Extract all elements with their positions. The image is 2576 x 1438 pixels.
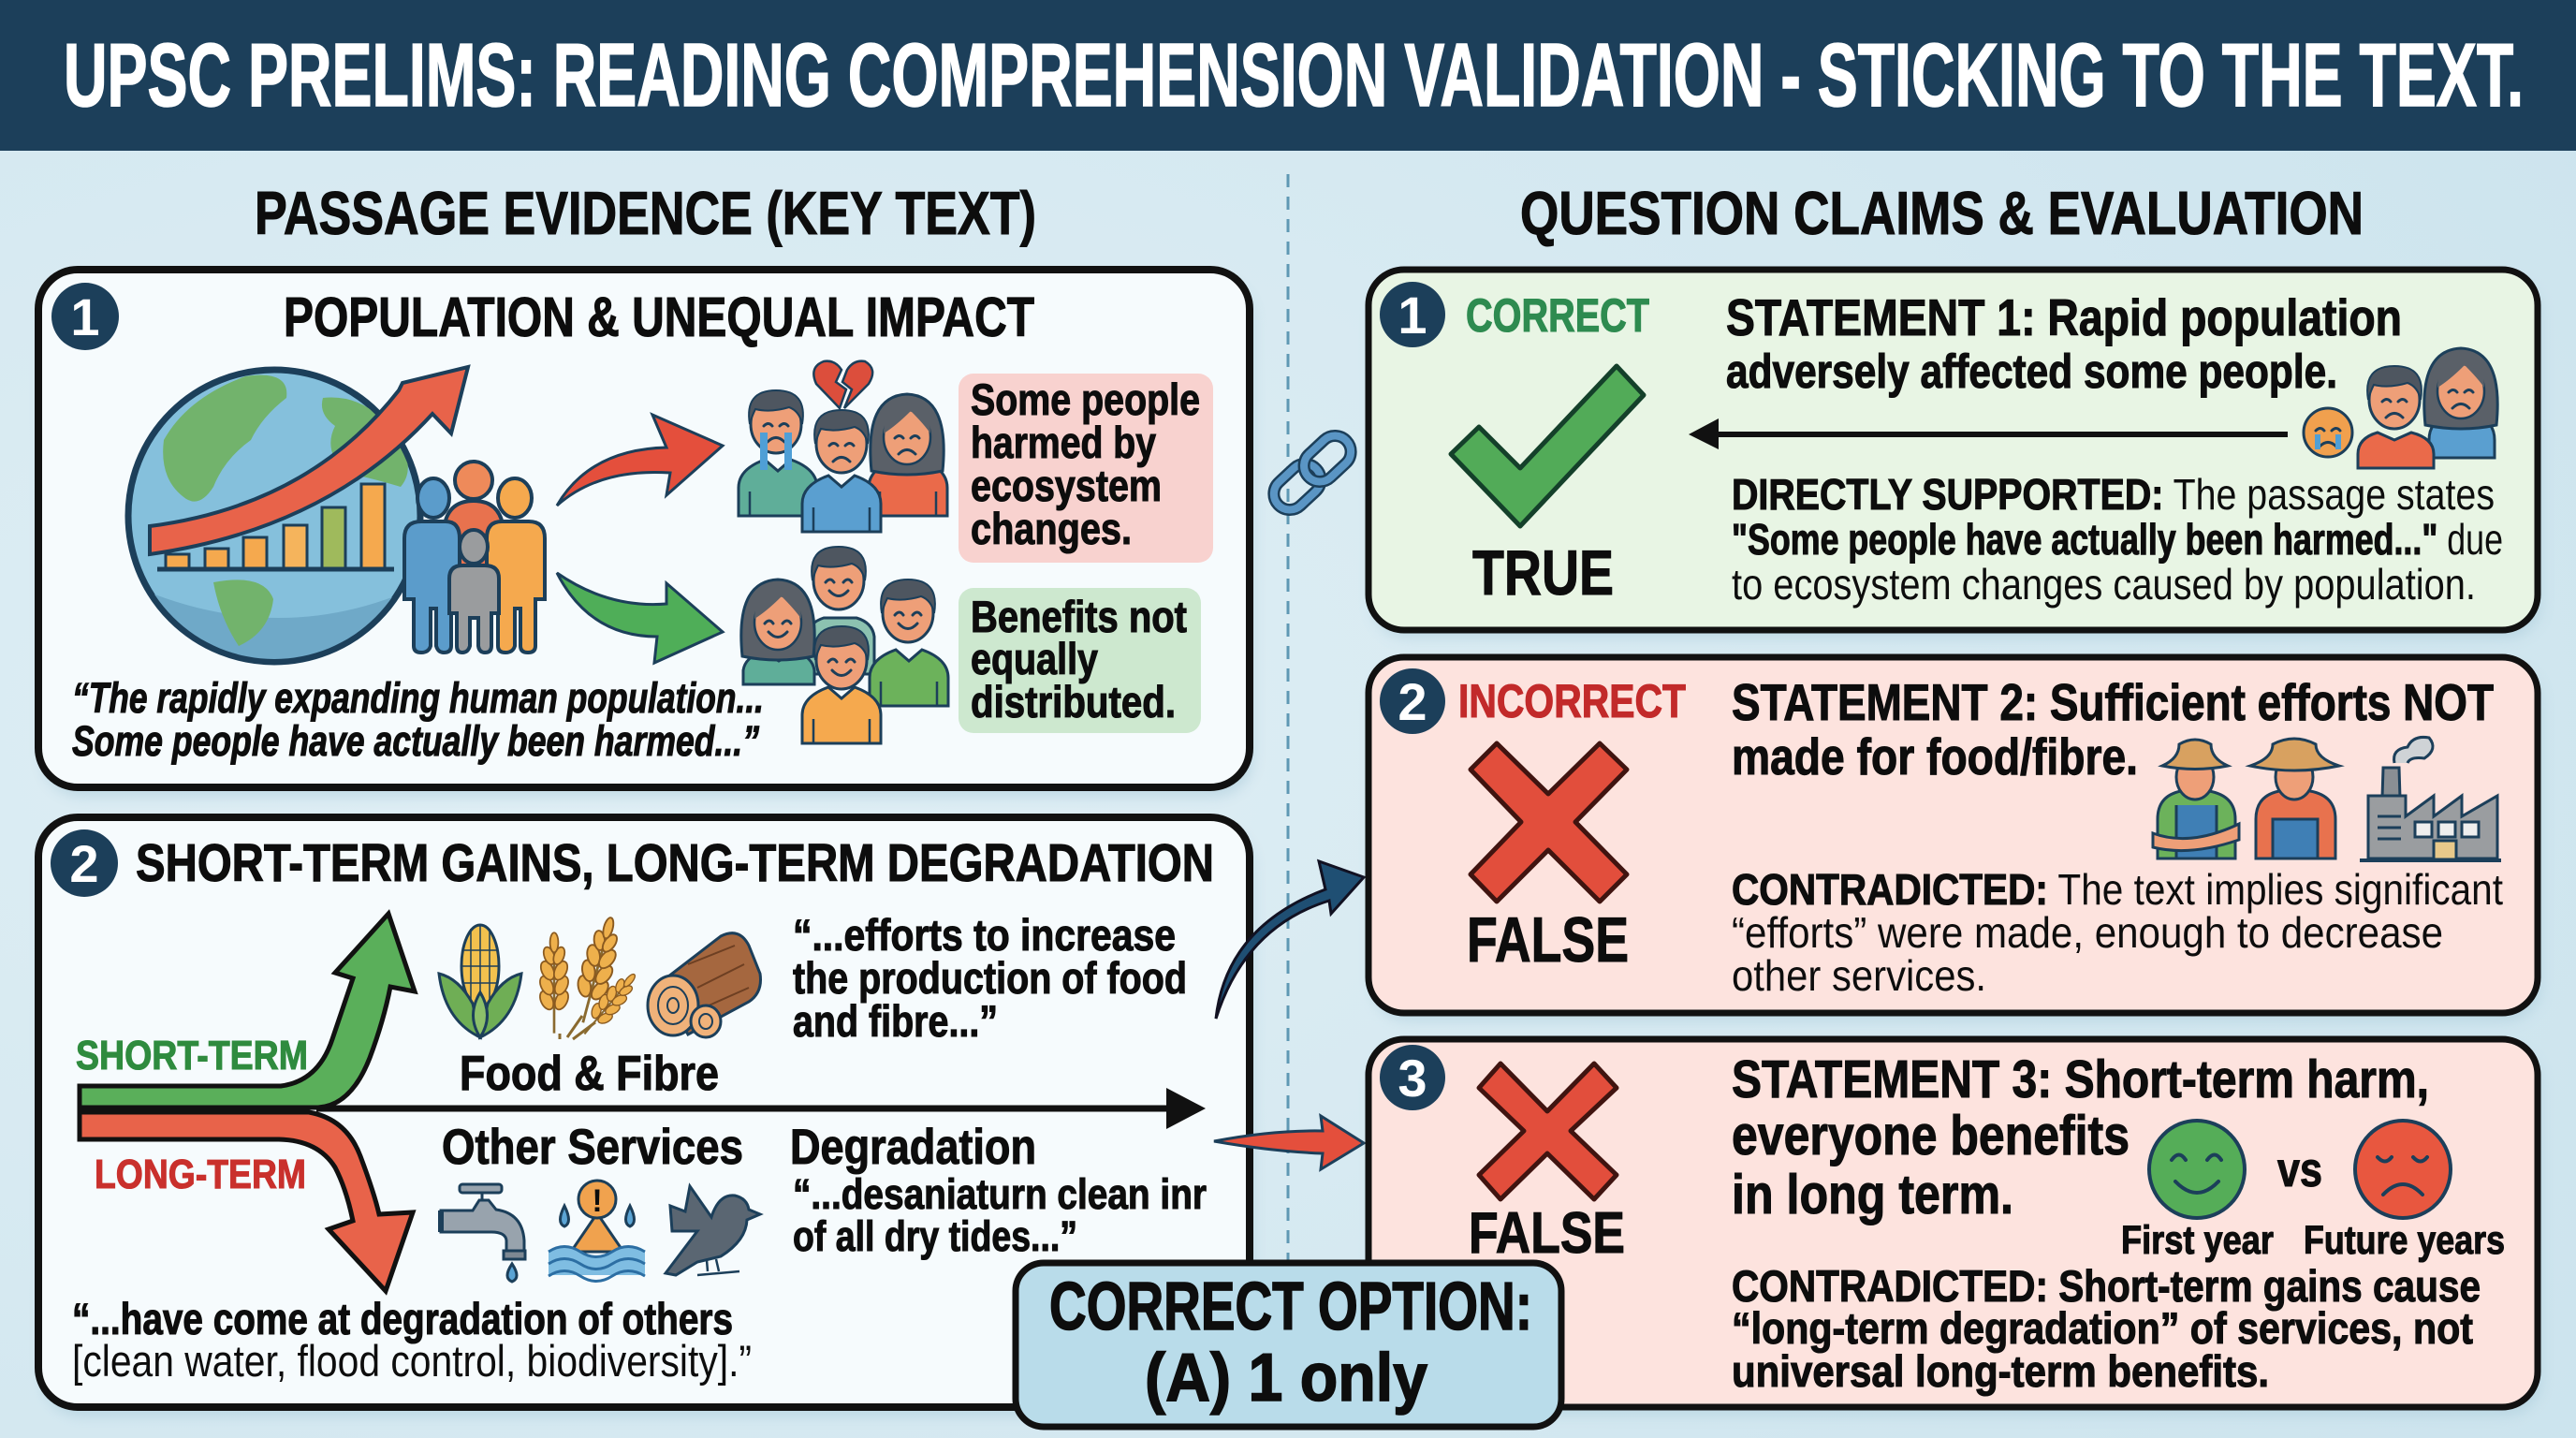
icon: cross — [1471, 743, 1627, 902]
icon: sad face — [2355, 1121, 2451, 1218]
callout: harmed: harmed by — [971, 418, 1156, 467]
quote: population: Some people have actually been harmed...” — [72, 717, 759, 765]
arrow: growth — [150, 367, 468, 554]
label: degradation: Degradation — [790, 1120, 1036, 1175]
icon: tap — [441, 1184, 525, 1282]
evaluation 1 text — [1732, 470, 2503, 609]
arrow: green to benefitted people — [557, 573, 723, 663]
label: food and fibre: Food & Fibre — [460, 1047, 719, 1101]
evaluation 3 text: CONTRADICTED: Short-term gains cause — [1732, 1261, 2481, 1311]
statement 3 text: STATEMENT 3: Short-term harm, — [1732, 1049, 2429, 1109]
statement 2 text — [1732, 673, 2494, 785]
callout: correct option: (A) 1 only — [1145, 1341, 1427, 1416]
statement 1 text: adversely affected some people. — [1726, 345, 2337, 398]
evaluation 3 text: “long-term degradation” of services, not — [1732, 1303, 2473, 1353]
panel heading: SHORT-TERM GAINS, LONG-TERM DEGRADATION — [136, 833, 1214, 893]
evaluation 1 text: to ecosystem changes caused by population. — [1732, 560, 2476, 609]
icon: cross — [1479, 1064, 1617, 1199]
icon: wheat — [537, 913, 644, 1042]
quote: food and fibre — [793, 910, 1187, 1046]
statement 3 text — [1732, 1049, 2429, 1225]
icon: check mark — [1451, 366, 1644, 526]
icon: happy face — [2149, 1121, 2245, 1218]
verdict: false: FALSE — [1467, 904, 1629, 976]
icon: family group — [404, 462, 545, 653]
panel: statement 1 — [1368, 270, 2541, 638]
quote: food and fibre: the production of food — [793, 953, 1187, 1003]
quote: degradation of others — [72, 1294, 752, 1386]
callout: correct option — [1016, 1263, 1561, 1427]
statement 1 text: STATEMENT 1: Rapid population — [1726, 288, 2402, 346]
badge 3: 3 — [1398, 1049, 1427, 1108]
arrow: passage to statement 2 — [1216, 861, 1364, 1019]
callout: harmed — [959, 374, 1213, 563]
evaluation 2 text: CONTRADICTED: The text implies significant — [1732, 865, 2503, 914]
quote: degradation of others: [clean water, flood control, biodiversity].” — [72, 1336, 752, 1386]
icon: flood warning: ! — [592, 1183, 603, 1219]
statement 3 text: everyone benefits — [1732, 1105, 2130, 1167]
label: incorrect: INCORRECT — [1458, 675, 1686, 727]
panel: statement 2 — [1368, 657, 2541, 1021]
label: long-term: LONG-TERM — [95, 1152, 306, 1197]
heading: question claims: QUESTION CLAIMS & EVALUATION — [1520, 179, 2364, 247]
arrow: short-term green — [80, 914, 415, 1108]
icon: globe with growth chart — [122, 367, 468, 674]
badge 2: 2 — [69, 834, 99, 893]
statement 3 text: in long term. — [1732, 1164, 2013, 1225]
badge 1: 1 — [70, 287, 100, 346]
badge 2 — [51, 829, 118, 897]
icon: chain link — [1267, 429, 1357, 517]
callout: benefits: equally — [971, 634, 1098, 683]
icon: sad people — [2304, 348, 2497, 468]
title banner — [0, 0, 2576, 151]
bar chart — [157, 484, 394, 569]
label: future years: Future years — [2304, 1218, 2505, 1263]
badge 3 — [1380, 1045, 1445, 1110]
evaluation 2 text — [1732, 865, 2503, 1000]
evaluation 3 text: universal long-term benefits. — [1732, 1346, 2269, 1396]
icon: bird — [666, 1186, 760, 1275]
quote: degradation — [793, 1170, 1207, 1260]
statement 2 text: made for food/fibre. — [1732, 727, 2138, 785]
arrow: red to harmed people — [557, 415, 723, 506]
arrow: timeline — [316, 1088, 1206, 1129]
icon: happy people — [741, 547, 948, 743]
callout: benefits: Benefits not — [971, 592, 1187, 641]
label: short-term: SHORT-TERM — [76, 1033, 308, 1078]
label: first year: First year — [2121, 1218, 2274, 1263]
callout: correct option: CORRECT OPTION: — [1049, 1269, 1532, 1344]
quote: food and fibre: and fibre...” — [793, 996, 998, 1046]
icon: sad people — [739, 361, 947, 532]
callout: benefits: distributed. — [971, 677, 1176, 726]
icon: flood warning — [549, 1181, 645, 1281]
quote: degradation of others: “...have come at degradation of others — [72, 1294, 733, 1343]
label: vs: vs — [2277, 1143, 2322, 1197]
arrow: support — [1689, 418, 2288, 449]
icon: farmers and factory — [2153, 737, 2501, 860]
icon: logs — [648, 933, 760, 1037]
evaluation 2 text: “efforts” were made, enough to decrease — [1732, 908, 2443, 957]
quote: degradation: of all dry tides...” — [793, 1212, 1077, 1260]
badge 2: 2 — [1398, 672, 1427, 731]
verdict: false: FALSE — [1469, 1201, 1625, 1266]
badge 1: 1 — [1398, 286, 1427, 345]
arrow: passage to statement 3 — [1214, 1116, 1364, 1169]
evaluation 3 text — [1732, 1261, 2481, 1396]
quote: food and fibre: “...efforts to increase — [793, 910, 1176, 960]
quote: population — [72, 674, 764, 765]
arrow: long-term red — [80, 1112, 413, 1291]
icon: corn — [439, 925, 521, 1037]
quote: degradation: “...desaniaturn clean inr — [793, 1170, 1207, 1218]
icon: broken heart — [813, 361, 872, 408]
verdict: true: TRUE — [1472, 537, 1614, 609]
panel heading: POPULATION & UNEQUAL IMPACT — [284, 286, 1034, 348]
callout: harmed: ecosystem — [971, 461, 1162, 510]
panel: short-term gains, long-term degradation — [38, 817, 1253, 1416]
callout: benefits — [959, 588, 1201, 733]
heading: passage evidence: PASSAGE EVIDENCE (KEY TEXT) — [255, 179, 1036, 247]
panel: population and unequal impact — [38, 270, 1253, 797]
callout: harmed: changes. — [971, 504, 1132, 553]
evaluation 1 text: DIRECTLY SUPPORTED: The passage states — [1732, 470, 2495, 519]
statement 1 text — [1726, 288, 2402, 398]
badge 2 — [1380, 668, 1445, 734]
callout: harmed: Some people — [971, 374, 1200, 424]
badge 1 — [51, 283, 119, 350]
quote: population: “The rapidly expanding human population... — [72, 674, 764, 722]
badge 1 — [1380, 282, 1445, 347]
evaluation 2 text: other services. — [1732, 951, 1986, 1000]
panel: statement 3 — [1368, 1039, 2541, 1416]
label: other services: Other Services — [442, 1120, 743, 1175]
label: correct: CORRECT — [1466, 289, 1649, 342]
